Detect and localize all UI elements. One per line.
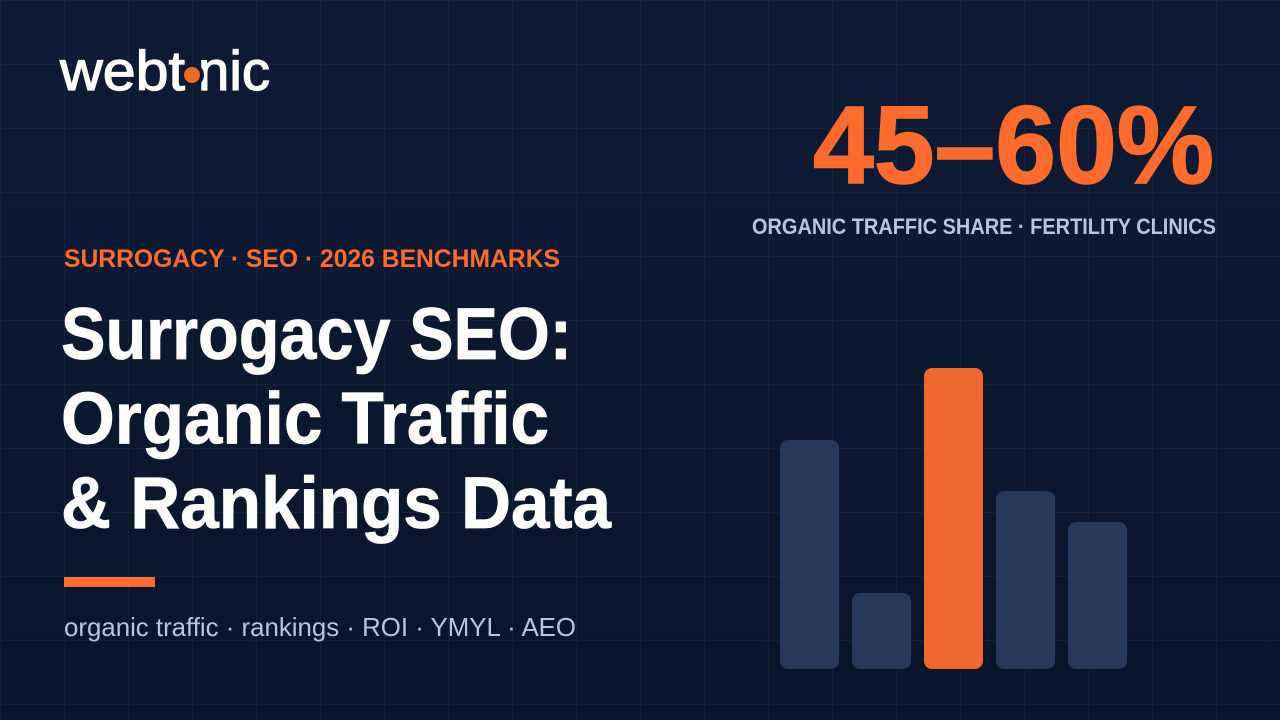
logo: webtonic: nic [198,39,270,102]
title: Surrogacy SEO: [61,294,572,375]
logo: webtonic [59,39,270,102]
topic list: organic traffic · rankings · ROI · YMYL · AEO [64,612,576,642]
bar 3: highlighted [924,368,983,669]
icon: logo orange dot [184,67,200,83]
bar chart [780,368,1127,669]
logo: webtonic: webt [59,39,185,102]
bar 2 [852,593,911,669]
title: & Rankings Data [61,463,612,544]
title: Organic Traffic [61,378,549,460]
bar 4 [996,491,1055,669]
stat caption: ORGANIC TRAFFIC SHARE · FERTILITY CLINICS [752,214,1216,239]
accent rule [64,577,155,587]
bar 5 [1068,522,1127,669]
title [61,294,612,544]
headline stat: 45–60% [813,84,1214,207]
bar 1 [780,440,839,669]
eyebrow: SURROGACY · SEO · 2026 BENCHMARKS [64,245,560,273]
